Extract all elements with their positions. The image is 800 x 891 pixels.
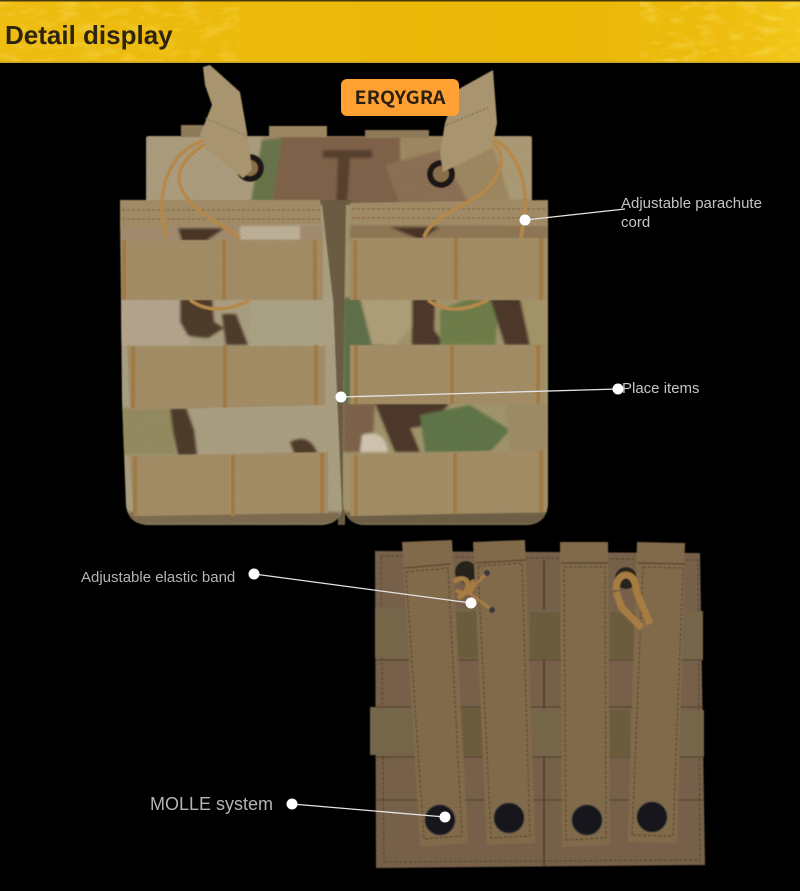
left pouch bbox=[120, 200, 342, 525]
elastic cords bbox=[162, 138, 525, 309]
front pouch photo bbox=[120, 65, 548, 525]
rear panel bbox=[146, 125, 532, 208]
grommets bbox=[236, 154, 455, 188]
callout: molle system: MOLLE system bbox=[150, 794, 273, 814]
callout: parachute cord bbox=[520, 195, 762, 231]
webbing straps bbox=[121, 238, 548, 516]
callout: elastic band bbox=[81, 568, 476, 608]
back pouch photo bbox=[370, 540, 705, 868]
brand badge bbox=[341, 79, 459, 116]
gap between pouches bbox=[320, 200, 352, 525]
right pouch bbox=[343, 200, 548, 525]
knotted cords bbox=[454, 570, 650, 628]
grommets bbox=[455, 561, 637, 589]
back panel bbox=[370, 551, 705, 868]
callout: place items: Place items bbox=[622, 380, 700, 397]
right pull tab bbox=[440, 70, 497, 172]
callout: elastic band: Adjustable elastic band bbox=[81, 569, 235, 586]
molle strap 3 bbox=[560, 542, 610, 847]
header banner bbox=[0, 0, 800, 63]
snap buttons bbox=[425, 802, 667, 835]
molle strap 4 bbox=[628, 542, 685, 843]
callout: parachute cord: Adjustable parachute bbox=[621, 195, 762, 212]
brand badge: ERQYGRA bbox=[354, 84, 446, 110]
molle strap 1 bbox=[402, 540, 468, 847]
callout: molle system bbox=[150, 794, 450, 822]
callout: parachute cord: cord bbox=[621, 214, 650, 231]
left pull tab bbox=[200, 65, 252, 178]
heading: Detail display bbox=[5, 20, 173, 50]
molle strap 2 bbox=[473, 540, 535, 845]
callout: place items bbox=[336, 380, 700, 402]
